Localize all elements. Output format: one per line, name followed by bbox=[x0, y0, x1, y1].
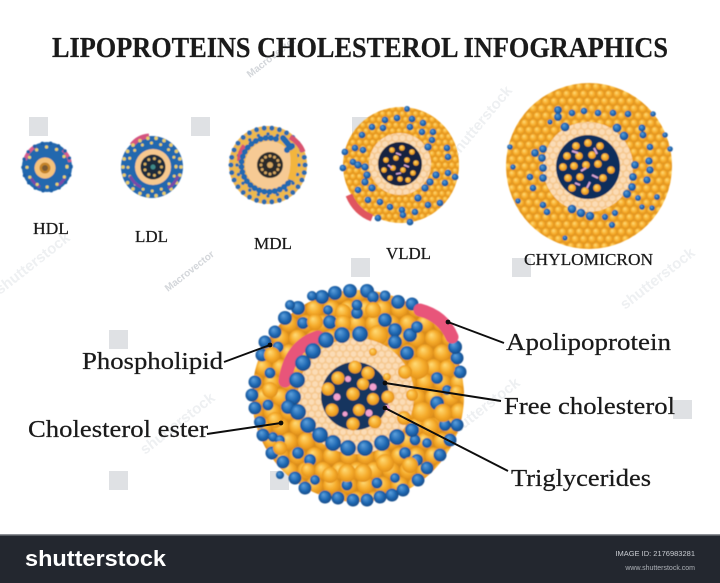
label: Cholesterol ester: Cholesterol ester bbox=[28, 416, 208, 443]
core balls bbox=[381, 145, 419, 183]
website: www.shutterstock.com bbox=[624, 565, 695, 572]
label: Phospholipid: Phospholipid bbox=[82, 348, 223, 375]
watermark squares and text bbox=[0, 35, 699, 490]
sphere: Chylomicron bbox=[506, 83, 673, 249]
large orange balls bbox=[262, 302, 464, 483]
watermark squares and text: shutterstock bbox=[445, 82, 516, 163]
label: Triglycerides: Triglycerides bbox=[511, 465, 651, 492]
title: LIPOPROTEINS CHOLESTEROL INFOGRAPHICS bbox=[52, 32, 668, 64]
sphere: LDL bbox=[121, 136, 183, 198]
label: Apolipoprotein: Apolipoprotein bbox=[506, 329, 671, 356]
label: Free cholesterol: Free cholesterol bbox=[504, 393, 675, 420]
core orange balls bbox=[322, 360, 394, 430]
leader line end points bbox=[268, 320, 450, 425]
apolipoprotein patches bbox=[285, 310, 452, 381]
label: CHYLOMICRON: CHYLOMICRON bbox=[524, 250, 653, 269]
label: HDL: HDL bbox=[33, 219, 69, 238]
label: LDL: LDL bbox=[135, 227, 168, 246]
footer logo: shutterstock bbox=[25, 546, 167, 571]
sphere: MDL bbox=[229, 126, 307, 204]
main lipoprotein sphere bbox=[246, 284, 466, 506]
core bbox=[321, 362, 389, 430]
watermark squares and text: shutterstock bbox=[442, 374, 524, 443]
watermark squares and text: Macrovector bbox=[245, 35, 299, 80]
sphere: HDL bbox=[22, 142, 72, 192]
sphere: VLDL bbox=[340, 106, 459, 225]
inner blue arc bbox=[281, 313, 423, 456]
cholesterol molecules bbox=[334, 376, 390, 416]
watermark squares and text: shutterstock bbox=[137, 389, 219, 458]
peach layer bbox=[298, 338, 414, 454]
footer bar bbox=[0, 534, 720, 583]
image id: IMAGE ID: 2176983281 bbox=[615, 549, 695, 558]
leader lines bbox=[207, 322, 508, 471]
label: VLDL: VLDL bbox=[386, 244, 431, 263]
outer blue balls bbox=[246, 284, 466, 506]
core balls bbox=[559, 139, 615, 195]
blue balls bbox=[507, 106, 673, 241]
label: MDL: MDL bbox=[254, 234, 292, 253]
blue balls bbox=[340, 106, 458, 225]
watermark squares and text: Macrovector bbox=[163, 249, 217, 294]
watermark squares and text: shutterstock bbox=[617, 244, 699, 313]
orange wedge right of core bbox=[369, 348, 418, 425]
